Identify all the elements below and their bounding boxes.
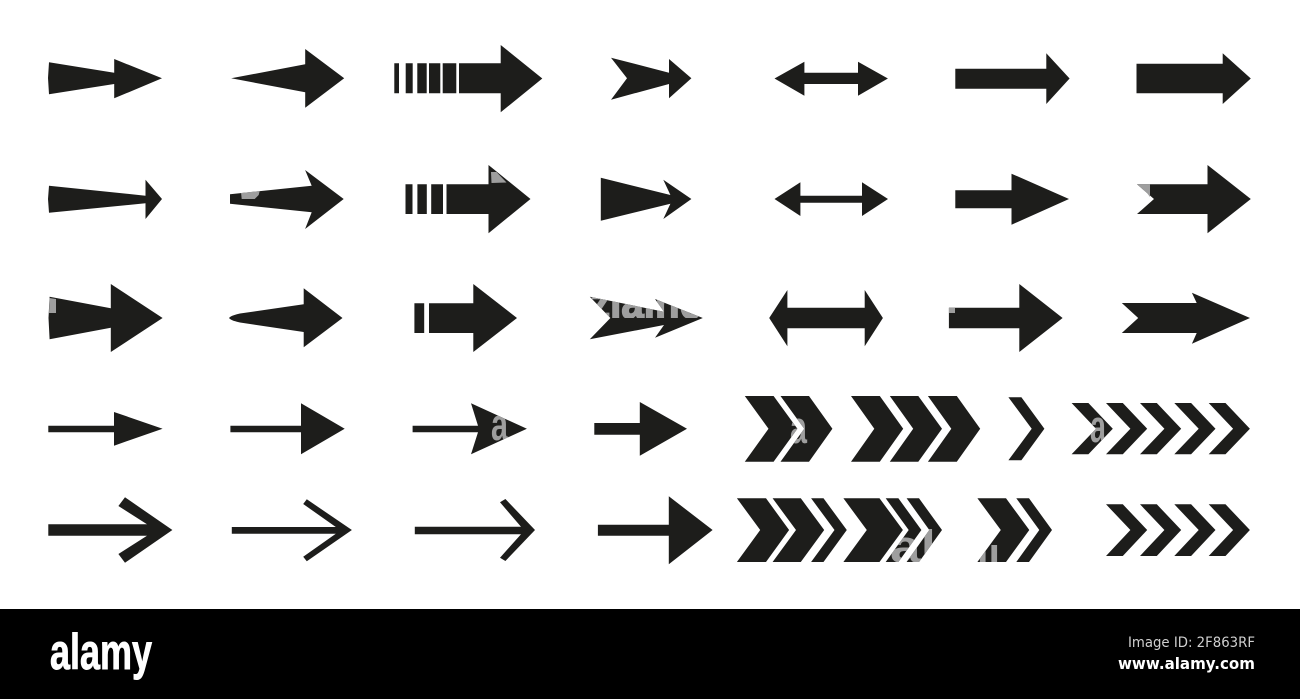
chevrons: double: a (790, 402, 808, 453)
double arrow row 3 (769, 290, 883, 346)
arrow row 1 col 4: notched tail (611, 58, 691, 100)
chevrons: mixed group (737, 498, 942, 562)
arrow row 3 col 3: striped tail (414, 284, 517, 352)
arrow row 4 col 3: a (491, 399, 509, 450)
arrow row 5 col 4 (598, 496, 713, 564)
arrow row 4 col 2 (230, 403, 345, 454)
arrow row 3 col 4: double head with watermark: zlalhe (590, 277, 702, 328)
footer bar (0, 609, 1300, 699)
chevrons: four small (1106, 504, 1250, 556)
arrow row 4 col 3 (413, 399, 527, 454)
chevrons: double (745, 396, 832, 462)
chevron: single thin (1008, 397, 1044, 460)
arrow row 4 col 1 (48, 412, 163, 446)
arrow row 1 col 6 (955, 53, 1070, 104)
image id: Image ID: 2F863RF (1128, 635, 1255, 651)
arrow row 5 col 2: open head (232, 499, 352, 561)
arrow row 2 col 7: notched tail (1137, 165, 1251, 233)
arrow row 2 col 3: striped tail (406, 165, 530, 233)
arrow row 2 col 6 (955, 174, 1069, 225)
arrow row 2 col 1 (48, 180, 162, 219)
chevrons: mixed group: al (890, 521, 936, 572)
chevrons: triple (851, 396, 980, 462)
website: www.alamy.com (1118, 654, 1255, 673)
arrow row 1 col 1 (48, 59, 162, 98)
arrow row 2 col 4 (601, 178, 691, 221)
arrow row 3 col 1 (48, 284, 163, 352)
chevrons: large and thin pair: ll (977, 537, 1000, 588)
arrow row 2 col 2 (230, 170, 344, 229)
chevrons: five small: a (1090, 401, 1107, 452)
arrow row 3 col 4: double head with watermark (590, 296, 703, 340)
arrow row 3 col 7: notched tail (1122, 293, 1250, 344)
double arrow row 2 (774, 182, 888, 216)
chevrons: large and thin pair (978, 498, 1052, 562)
arrow row 5 col 1: open head (48, 497, 172, 563)
chevrons: five small (1072, 401, 1250, 454)
arrow row 1 col 3: striped tail (394, 45, 542, 112)
arrow row 3 col 6 (949, 284, 1063, 352)
arrow row 1 col 7 (1136, 53, 1251, 104)
double arrow row 1 (774, 62, 888, 96)
arrow row 5 col 3: open head (415, 499, 535, 561)
arrow row 1 col 2 (231, 49, 344, 108)
arrow row 3 col 2 (229, 288, 342, 347)
arrow row 4 col 4 (594, 402, 687, 456)
logo: alamy: alamy (50, 624, 152, 680)
